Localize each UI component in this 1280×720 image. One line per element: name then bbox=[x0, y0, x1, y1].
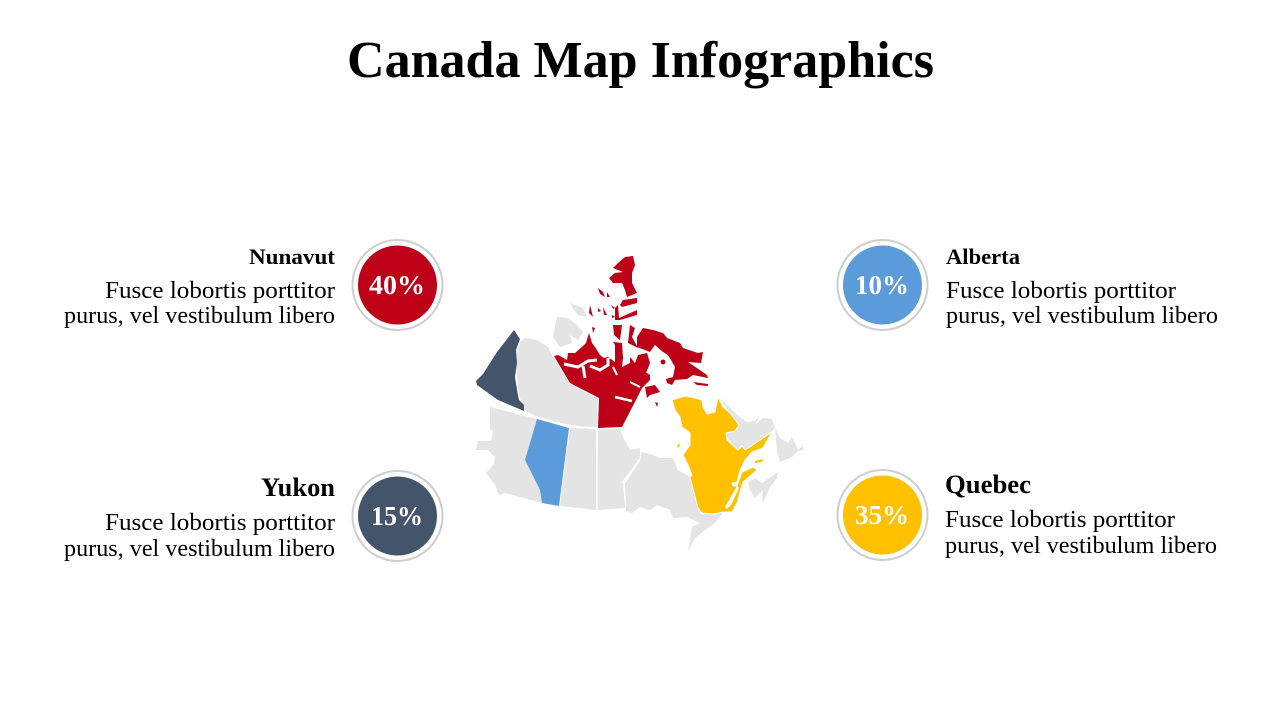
badge: 35%: 35% bbox=[855, 500, 909, 530]
description bbox=[946, 278, 1218, 329]
map of Canada bbox=[476, 256, 803, 551]
title: Canada Map Infographics bbox=[347, 32, 934, 89]
description: purus, vel vestibulum libero bbox=[64, 536, 335, 562]
item: Yukon bbox=[64, 471, 442, 562]
badge: 35% bbox=[838, 470, 928, 560]
badge: 40%: 40% bbox=[369, 270, 425, 300]
item: Alberta bbox=[838, 240, 1218, 330]
description: purus, vel vestibulum libero bbox=[64, 303, 335, 329]
description bbox=[945, 507, 1217, 559]
description bbox=[64, 278, 335, 329]
description: purus, vel vestibulum libero bbox=[946, 303, 1218, 329]
region: Alberta bbox=[525, 419, 569, 506]
description: purus, vel vestibulum libero bbox=[945, 533, 1217, 559]
badge: 40% bbox=[352, 240, 442, 330]
description: Fusce lobortis porttitor bbox=[105, 278, 335, 304]
badge: 15% bbox=[352, 471, 442, 561]
description: Fusce lobortis porttitor bbox=[105, 510, 335, 536]
badge: 15%: 15% bbox=[371, 501, 423, 531]
region: gray provinces and territories bbox=[476, 303, 803, 551]
heading: Alberta bbox=[946, 244, 1020, 269]
item: Nunavut bbox=[64, 240, 442, 330]
description bbox=[64, 510, 335, 562]
region: Quebec bbox=[672, 396, 772, 514]
description: Fusce lobortis porttitor bbox=[946, 278, 1176, 304]
heading: Nunavut bbox=[249, 244, 336, 269]
heading: Quebec bbox=[945, 470, 1031, 499]
item: Quebec bbox=[838, 470, 1217, 560]
boundary lines bbox=[477, 393, 640, 511]
badge: 10%: 10% bbox=[855, 270, 909, 300]
badge: 10% bbox=[838, 240, 928, 330]
heading: Yukon bbox=[261, 473, 336, 502]
region: Nunavut bbox=[554, 256, 708, 428]
region: Yukon bbox=[476, 330, 524, 411]
description: Fusce lobortis porttitor bbox=[945, 507, 1175, 533]
